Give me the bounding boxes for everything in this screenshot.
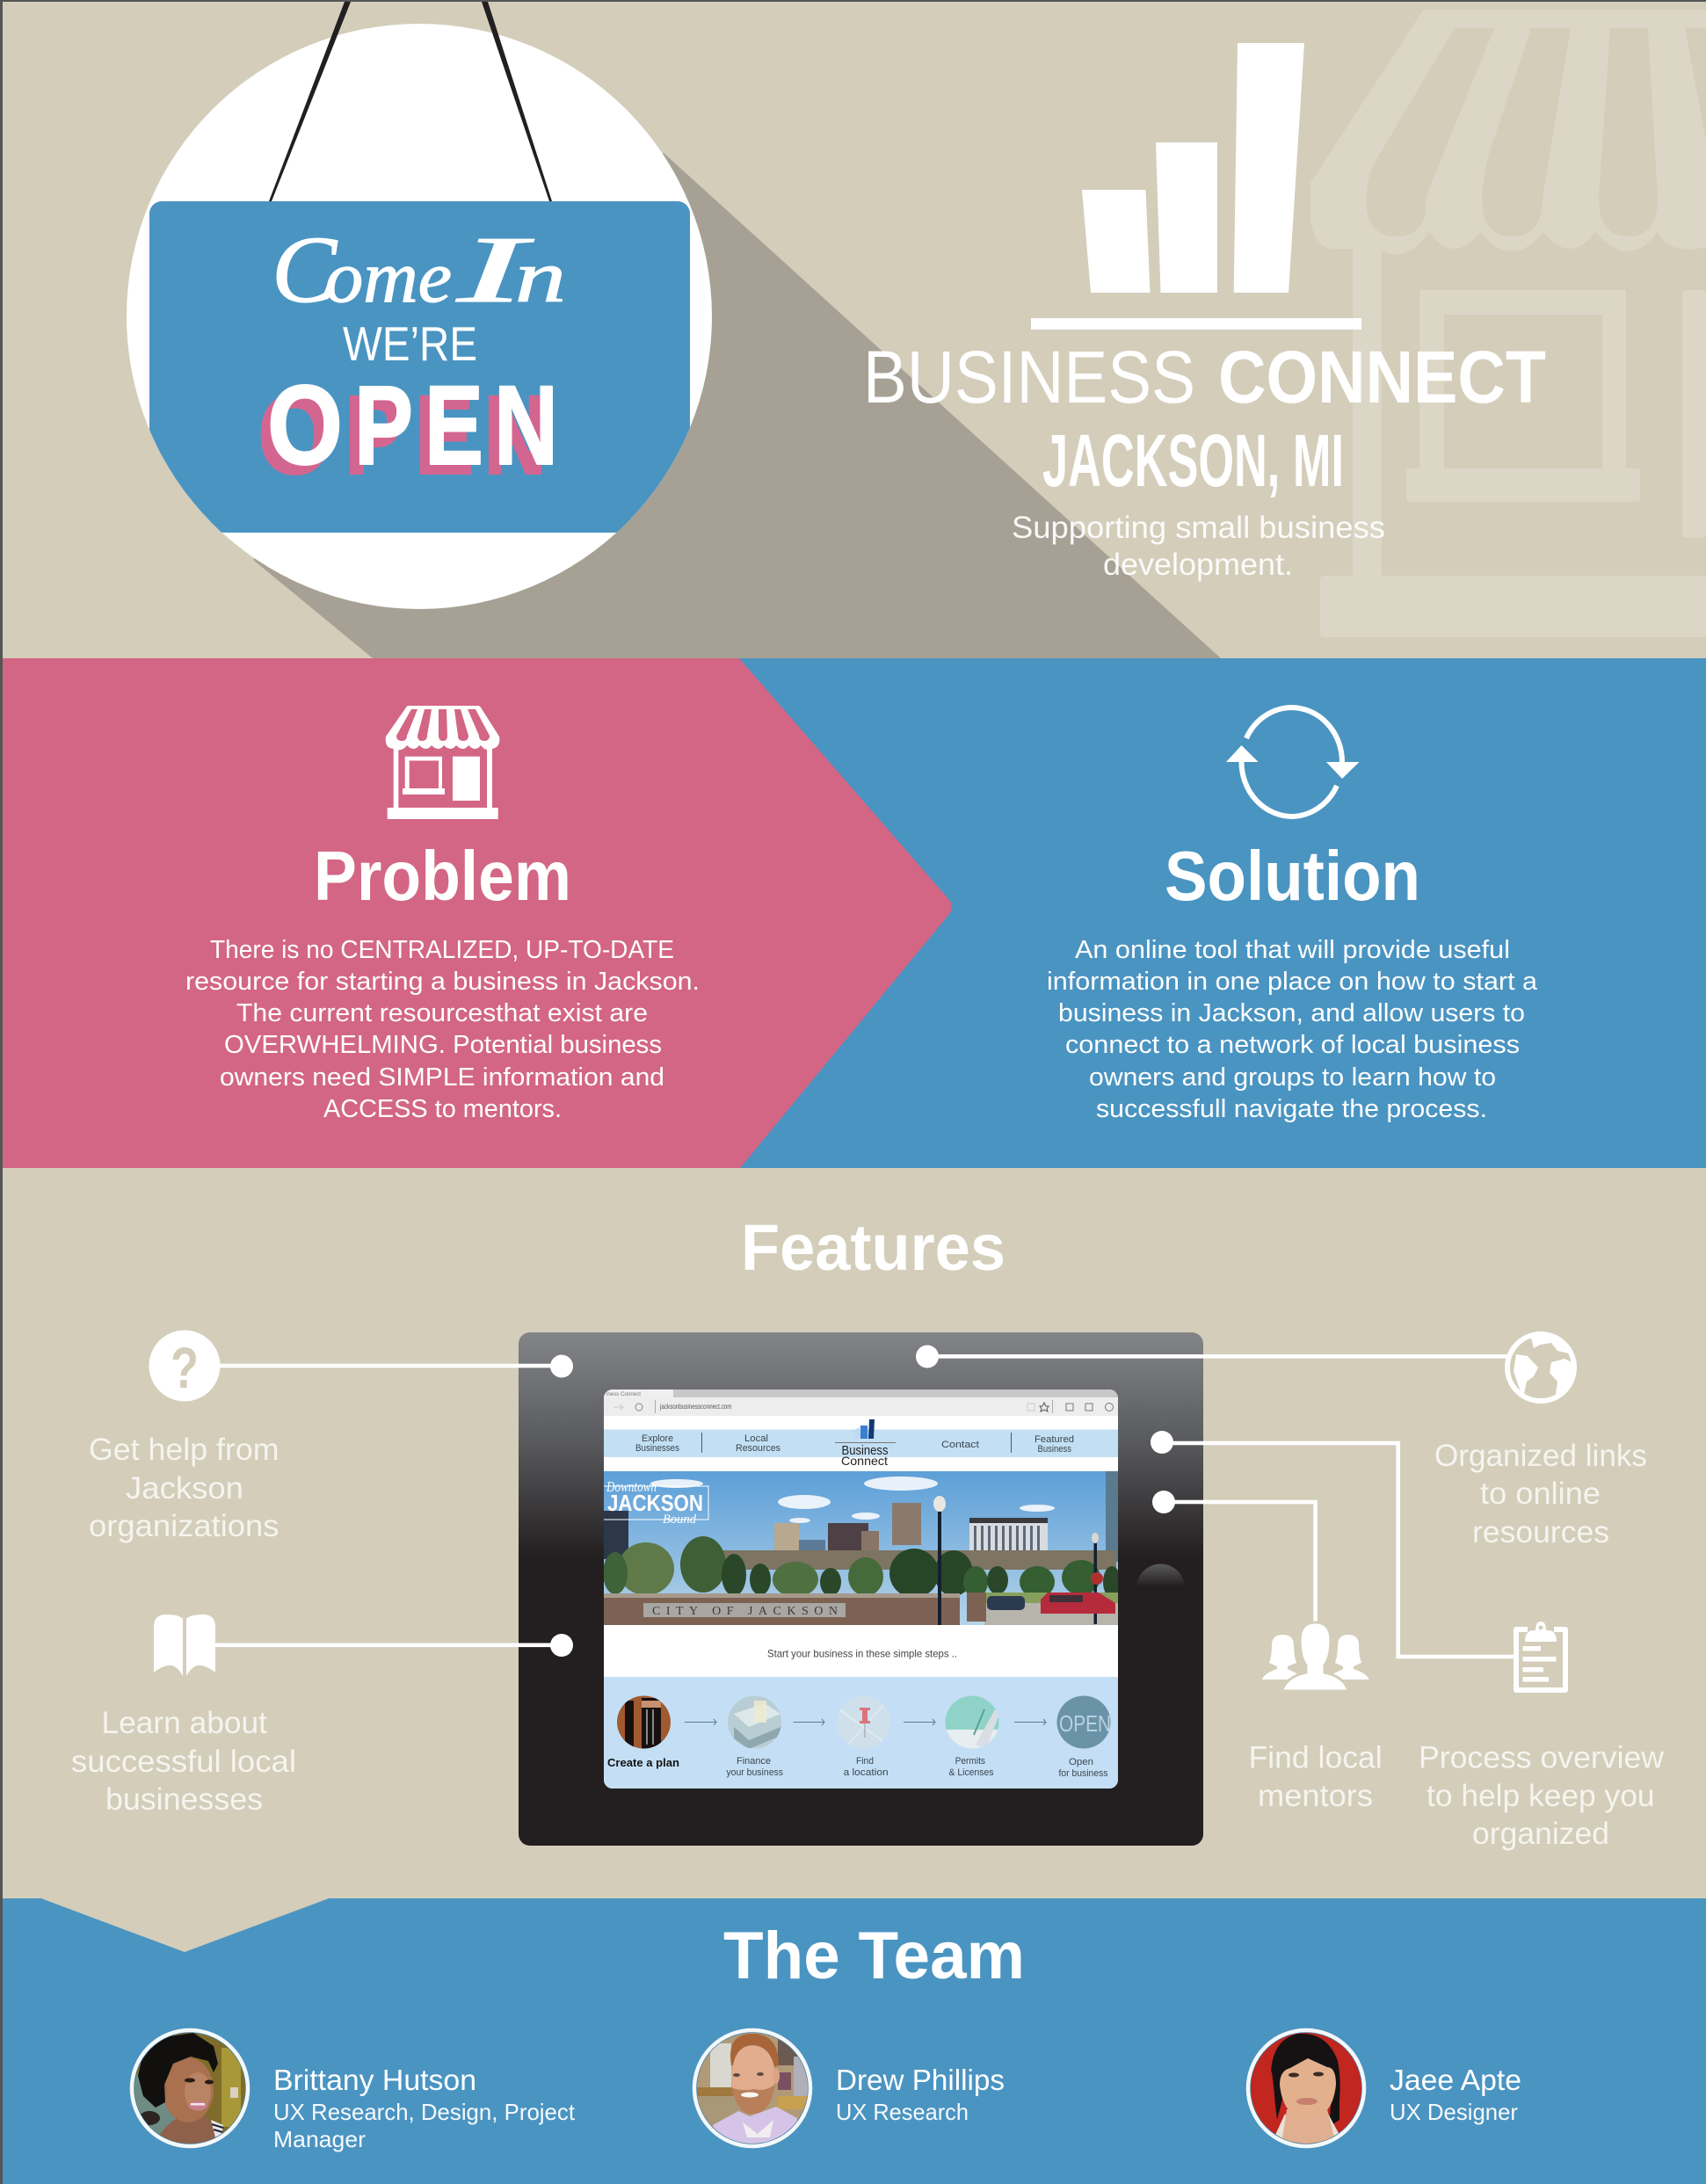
browser chrome: iness Connect: [606, 1392, 641, 1397]
step 2: finance: Finance: [737, 1756, 771, 1767]
sign text: come in: I: [455, 218, 535, 323]
white circle: [127, 24, 712, 609]
downtown jackson logo: Downtown: [606, 1478, 657, 1495]
site navigation: Contact: [941, 1440, 979, 1450]
name and role: UX Research, Design, Project: [273, 2099, 576, 2125]
name and role: [836, 2064, 1005, 2125]
icon: storefront: [386, 706, 499, 819]
icon: people: [1262, 1622, 1369, 1691]
callout: get help from Jackson organizations: Jackson: [126, 1471, 243, 1506]
text: solution body: An online tool that will provide useful: [1075, 936, 1510, 964]
callout: process overview: Process overview: [1419, 1740, 1665, 1775]
name and role: Drew Phillips: [836, 2064, 1005, 2096]
step 5: open: [1056, 1695, 1111, 1779]
sign text: open shadow: N: [483, 373, 547, 498]
logo bars: [1031, 43, 1361, 330]
site navigation: Local: [744, 1433, 768, 1444]
sign text: we're: WE’RE: [343, 316, 477, 371]
step 4: permits: [945, 1695, 999, 1778]
text: problem body: ACCESS to mentors.: [323, 1095, 562, 1123]
heading: the team: The Team: [723, 1919, 1025, 1993]
step 1: create a plan: Create a plan: [607, 1756, 679, 1769]
steps band: [604, 1677, 1118, 1789]
callout: find local mentors: Find local: [1249, 1740, 1383, 1775]
tagline: Supporting small business: [1012, 511, 1385, 545]
callout: organized links to online resources: [916, 1334, 1647, 1549]
sign text: open shadow: P: [345, 373, 403, 498]
panel: hero: [127, 2, 1706, 658]
portrait: [1248, 2030, 1364, 2148]
step 5: open: OPEN: [1059, 1710, 1111, 1737]
callout: get help from Jackson organizations: organizations: [89, 1509, 279, 1543]
heading: solution: Solution: [1165, 837, 1420, 915]
step 3: find a location: Find: [856, 1756, 874, 1767]
sign text: come in: n: [515, 236, 566, 318]
name and role: Manager: [273, 2126, 366, 2152]
step 2: finance: [726, 1695, 783, 1778]
site logo: Business: [842, 1443, 888, 1458]
site navigation: [604, 1429, 1118, 1457]
text: problem body: [185, 936, 700, 1123]
background storefront watermark: [1310, 10, 1706, 637]
text: solution body: [1047, 936, 1538, 1123]
long shadow: [253, 153, 1221, 658]
site logo: Connect: [841, 1454, 888, 1468]
title: business connect: [863, 336, 1546, 418]
icon: clipboard: [1516, 1622, 1565, 1690]
step 1: create a plan: [607, 1694, 679, 1769]
text: solution body: business in Jackson, and allow users to: [1058, 999, 1525, 1027]
text: problem body: owners need SIMPLE information and: [220, 1063, 664, 1092]
text: solution body: owners and groups to learn how to: [1089, 1063, 1496, 1092]
downtown jackson logo: JACKSON: [607, 1490, 703, 1516]
step 3: find a location: [837, 1695, 891, 1778]
name and role: [1390, 2064, 1521, 2125]
step 5: open: for business: [1058, 1768, 1108, 1779]
panel: solution: [0, 658, 1706, 1168]
site navigation: Explore: [642, 1433, 673, 1444]
hanging ropes: [269, 2, 552, 201]
sign text: open: [267, 363, 558, 489]
website screenshot: [603, 1389, 1121, 1789]
callout: organized links to online resources: Organized links: [1434, 1439, 1647, 1473]
notch: [41, 1898, 329, 1952]
callout: learn about successful local businesses: [71, 1614, 573, 1817]
site logo: [835, 1419, 896, 1468]
site navigation: Featured: [1034, 1434, 1074, 1445]
name and role: [273, 2064, 576, 2152]
sign text: come in: ome: [325, 236, 452, 318]
sign text: open: N: [494, 363, 558, 489]
sign text: open: O: [267, 363, 343, 489]
step 2: finance: your business: [726, 1767, 783, 1778]
tablet device: [519, 1332, 1203, 1846]
sign text: open shadow: O: [258, 373, 333, 498]
site navigation: Businesses: [635, 1443, 679, 1454]
tagline: [1012, 511, 1385, 582]
site navigation: Business: [1037, 1444, 1071, 1455]
member: Jaee Apte: [1248, 2030, 1521, 2148]
step 4: permits: Permits: [955, 1756, 985, 1767]
browser chrome: [604, 1389, 1118, 1416]
heading: problem: Problem: [314, 837, 571, 915]
name and role: UX Designer: [1390, 2099, 1518, 2125]
text: solution body: successfull navigate the process.: [1096, 1095, 1487, 1123]
text: problem body: resource for starting a business in Jackson.: [185, 968, 700, 996]
callout: get help from Jackson organizations: [89, 1331, 573, 1543]
callout: get help from Jackson organizations: Get help from: [89, 1433, 279, 1467]
site navigation: Resources: [736, 1443, 780, 1454]
home button: [1136, 1564, 1185, 1604]
name and role: UX Research: [836, 2099, 969, 2125]
title: business connect: BUSINESS: [863, 336, 1195, 418]
photo sign text: CITY OF JACKSON: [652, 1605, 838, 1618]
icon: globe: [1507, 1334, 1575, 1401]
name and role: Jaee Apte: [1390, 2064, 1521, 2096]
sign text: open: P: [354, 363, 413, 489]
step arrows: [685, 1719, 1046, 1725]
steps tagline: Start your business in these simple steps ..: [767, 1647, 957, 1659]
sign text: come in: [272, 218, 566, 323]
panel: the team: [0, 1898, 1706, 2184]
callout: learn about successful local businesses: Learn about: [102, 1706, 267, 1740]
member: Brittany Hutson: [132, 2030, 576, 2152]
callout: organized links to online resources: resources: [1472, 1515, 1609, 1549]
callout: get help from Jackson organizations: ?: [171, 1335, 199, 1400]
sign text: come in: C: [272, 218, 338, 323]
step 4: permits: & Licenses: [949, 1767, 994, 1778]
text: problem body: OVERWHELMING. Potential business: [224, 1031, 662, 1059]
portrait: [132, 2030, 248, 2148]
text: solution body: connect to a network of local business: [1065, 1031, 1520, 1059]
browser chrome: jacksonbusinessconnect.com: [659, 1402, 731, 1411]
step 3: find a location: a location: [844, 1767, 889, 1778]
callout: process overview: to help keep you: [1427, 1779, 1655, 1813]
text: problem body: There is no CENTRALIZED, UP-TO-DATE: [210, 936, 674, 964]
heading: features: Features: [741, 1211, 1005, 1284]
downtown jackson logo: Bound: [663, 1513, 696, 1527]
callout: organized links to online resources: to online: [1480, 1477, 1601, 1511]
member: Drew Phillips: [694, 2030, 1005, 2149]
text: problem body: The current resourcesthat exist are: [236, 999, 648, 1027]
callout: process overview: organized: [1472, 1817, 1609, 1851]
text: solution body: information in one place on how to start a: [1047, 968, 1538, 996]
sign text: open: E: [425, 363, 483, 489]
icon: cycle arrows: [1226, 707, 1359, 816]
callout: find local mentors: mentors: [1258, 1779, 1373, 1813]
panel: problem: [0, 658, 952, 1168]
portrait: [694, 2030, 810, 2149]
step 5: open: Open: [1069, 1757, 1093, 1767]
subtitle: jackson, mi: JACKSON, MI: [1042, 419, 1344, 502]
tagline: development.: [1103, 548, 1293, 582]
sign text: open shadow: E: [415, 373, 474, 498]
title: business connect: CONNECT: [1218, 336, 1546, 418]
open sign: [141, 201, 703, 533]
name and role: Brittany Hutson: [273, 2064, 476, 2096]
sign text: open shadow: [258, 373, 547, 498]
callout: find local mentors: [1152, 1491, 1383, 1813]
callout: learn about successful local businesses: successful local: [71, 1745, 296, 1779]
city photo: [603, 1471, 1121, 1625]
callout: learn about successful local businesses: businesses: [105, 1782, 263, 1817]
downtown jackson logo: [604, 1482, 708, 1523]
awning slots: [1366, 28, 1706, 236]
callout: process overview: [1151, 1431, 1665, 1851]
